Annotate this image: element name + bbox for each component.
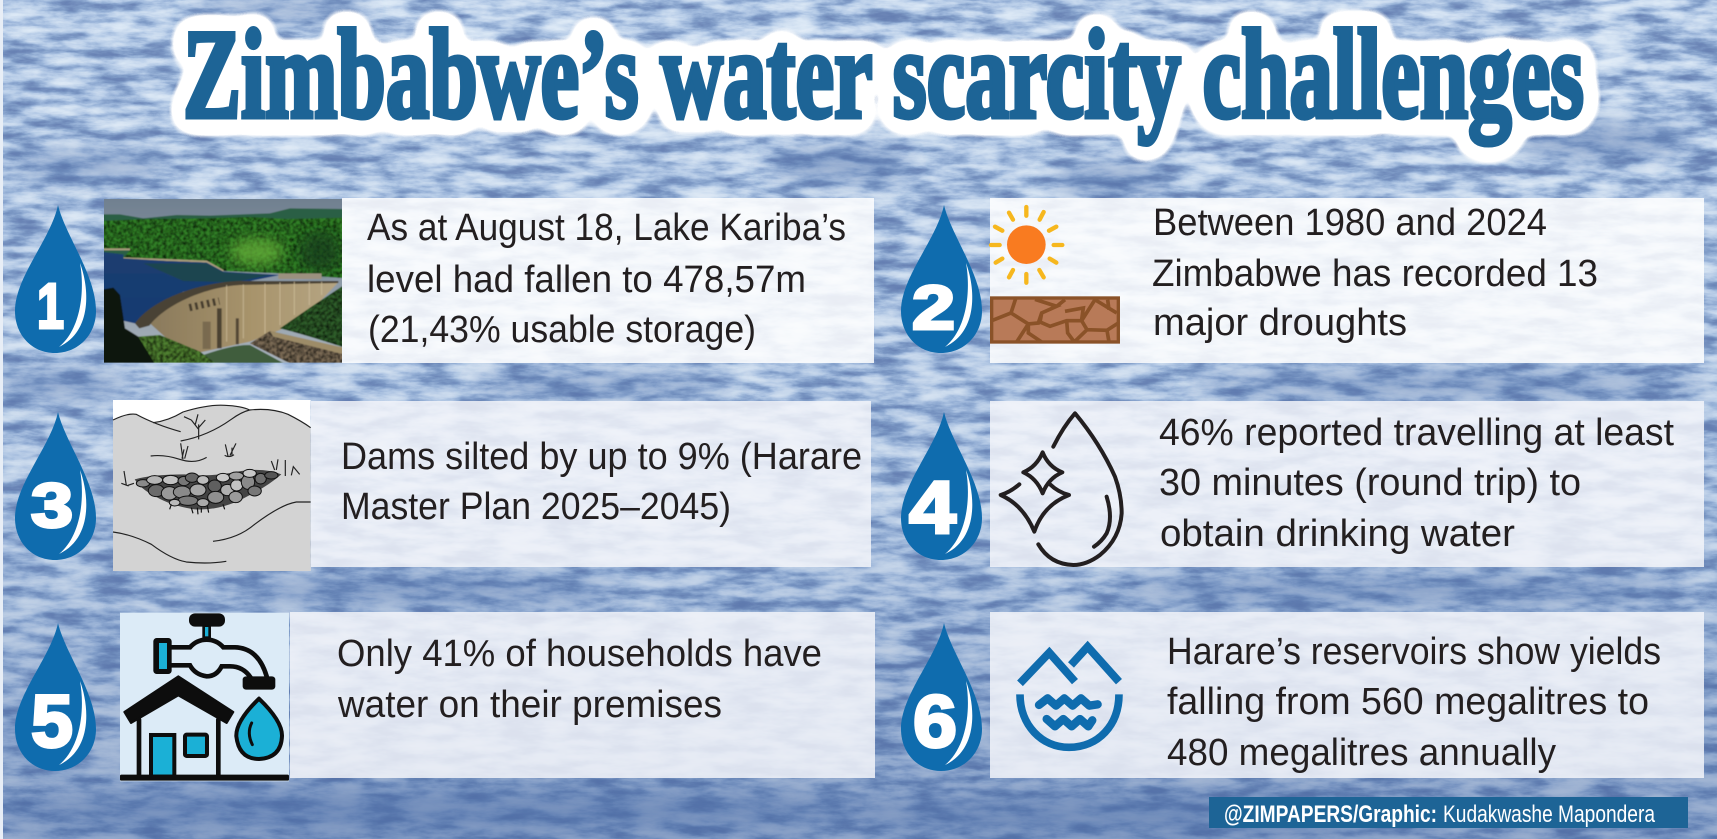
panel text: As at August 18, Lake Kariba’s (367, 207, 846, 249)
credit bar (1209, 797, 1688, 828)
panel text (341, 436, 862, 528)
number drop 3 (15, 412, 96, 560)
panel text (337, 633, 822, 726)
number drop 3: 3 (31, 472, 73, 541)
panel text (1159, 412, 1674, 555)
number drop 4: 4 (909, 466, 956, 549)
number drop 4 (901, 412, 982, 560)
credit bar: @ZIMPAPERS/Graphic: (1224, 801, 1437, 828)
number drop 6 (901, 623, 982, 771)
panel text: Dams silted by up to 9% (Harare (341, 436, 862, 478)
number drop 6: 6 (913, 680, 957, 763)
panel text: water on their premises (337, 684, 722, 726)
number drop 1: 1 (37, 270, 64, 342)
panel 2: droughts (901, 198, 1704, 363)
panel text: Only 41% of households have (337, 633, 822, 675)
icon: mountains over reservoir (1020, 647, 1119, 747)
panel text: Zimbabwe has recorded 13 (1152, 253, 1598, 295)
panel text: major droughts (1153, 302, 1407, 344)
panel 6: reservoir yields (901, 612, 1704, 778)
panel text: falling from 560 megalitres to (1167, 681, 1649, 723)
number drop 1 (15, 205, 96, 353)
icon: sun and cracked earth (991, 207, 1118, 342)
number drop 2 (901, 205, 982, 353)
number drop 5 (15, 623, 96, 771)
panel text: (21,43% usable storage) (368, 309, 756, 351)
icon: tap over house and drop (120, 613, 289, 781)
panel 3: silted dams (15, 400, 871, 571)
panel text: Between 1980 and 2024 (1153, 202, 1547, 244)
number drop 2: 2 (912, 274, 955, 343)
panel text: level had fallen to 478,57m (367, 259, 806, 301)
panel text: Master Plan 2025–2045) (341, 486, 731, 528)
illustration: silted hillside with rock dam (113, 400, 311, 571)
panel text: obtain drinking water (1160, 513, 1515, 555)
panel 1: Lake Kariba level (15, 195, 874, 367)
panel text: Harare’s reservoirs show yields (1167, 631, 1661, 673)
credit bar: Kudakwashe Mapondera (1443, 801, 1656, 828)
panel text: 30 minutes (round trip) to (1159, 462, 1581, 504)
panel 4: travel for drinking water (901, 401, 1704, 567)
panel 5: households with water (15, 612, 875, 781)
panel text: 46% reported travelling at least (1159, 412, 1674, 454)
photo: Kariba dam (100, 195, 347, 367)
panel text (1152, 202, 1598, 344)
panel text: 480 megalitres annually (1167, 732, 1556, 774)
panel text (367, 207, 846, 351)
number drop 5: 5 (31, 680, 73, 763)
icon: water drop with sparkles (1001, 413, 1122, 565)
panel text (1167, 631, 1661, 774)
